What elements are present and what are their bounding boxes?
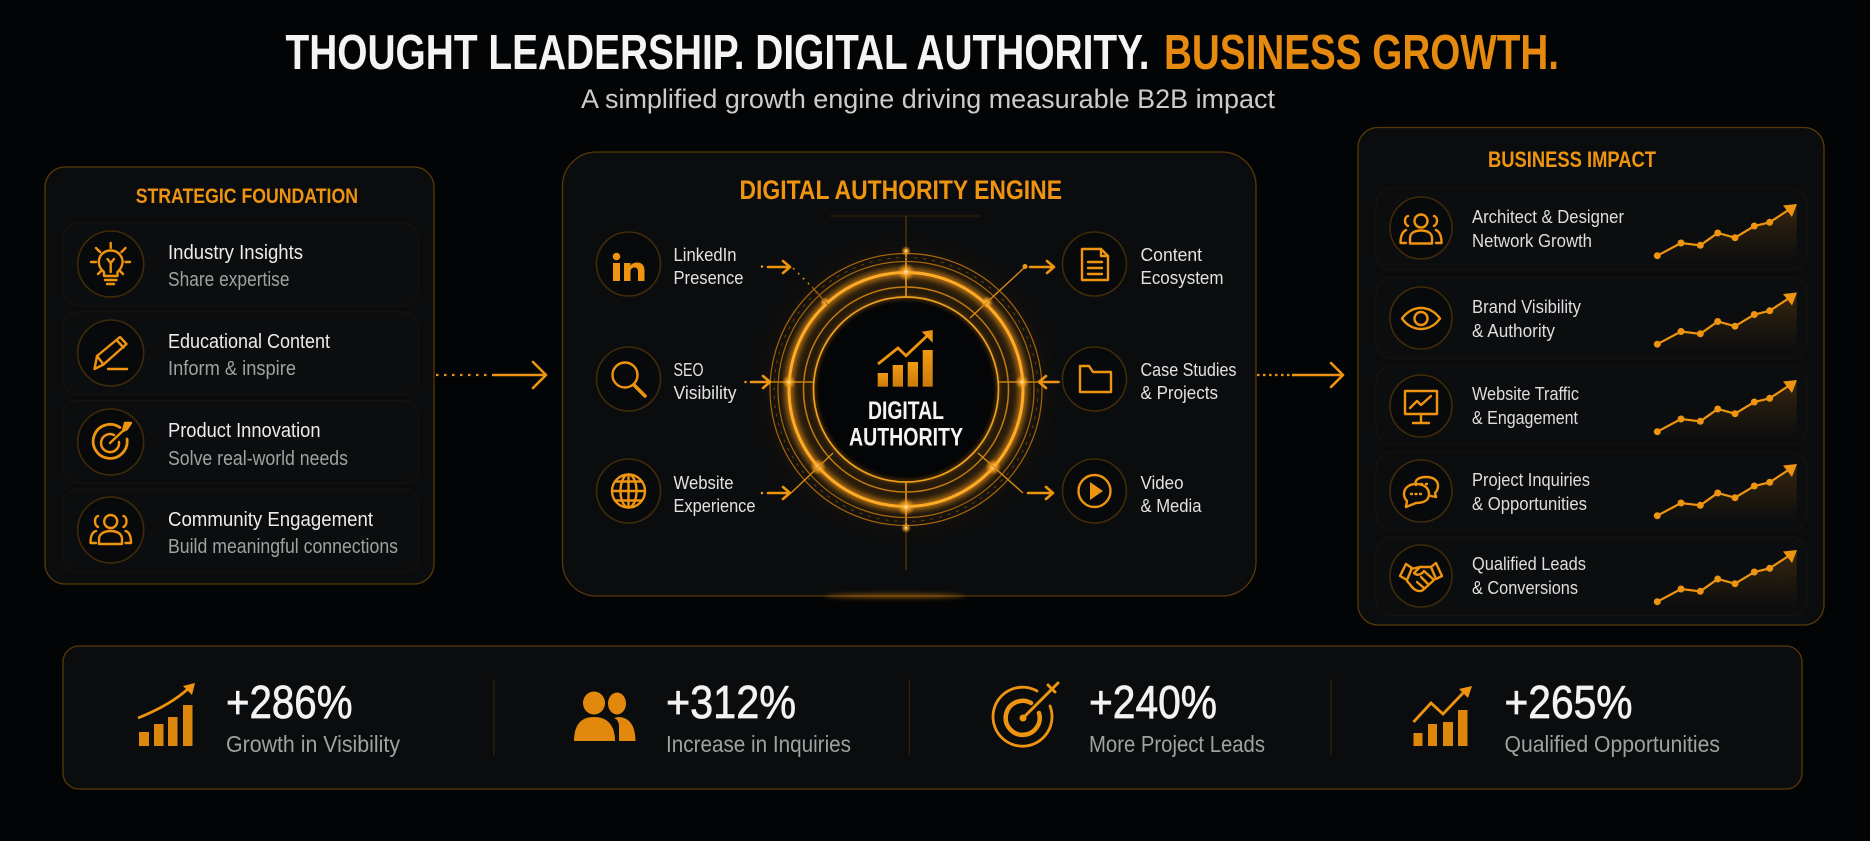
icon: people solid [574,692,636,741]
connectors: nodes and ring [744,261,1060,499]
node: video: & Media [1140,495,1202,516]
node: video: Video [1140,472,1184,493]
item: brand visibility: & Authority [1472,320,1556,341]
item: community engagement: Build meaningful connections [168,536,398,558]
item: qualified leads [1376,537,1807,616]
metric: more project leads: More Project Leads [1089,731,1265,757]
label: digital authority: AUTHORITY [849,424,963,452]
metric: growth in visibility: Growth in Visibility [226,731,400,757]
heading: strategic foundation: STRATEGIC FOUNDATION [136,184,358,208]
item: industry insights: Industry Insights [168,242,303,264]
node: website: Website [674,472,734,493]
metric: qualified opportunities [1414,676,1720,757]
arrow: engine to impact [1257,363,1343,387]
icon: bars with curve [138,683,195,746]
item: brand visibility [1376,277,1807,358]
panel: digital authority engine [562,152,1256,598]
node: content: Content [1140,244,1202,265]
metric: growth in visibility [138,676,400,757]
icon: bars with zigzag [1414,686,1472,746]
sparkle points [782,246,1029,533]
item: website traffic: & Engagement [1472,407,1578,428]
sparkline [1654,550,1797,608]
panel: strategic foundation [45,167,434,584]
item: educational content: Inform & inspire [168,358,296,380]
metric: increase in inquiries: Increase in Inquiries [666,731,851,757]
item: project inquiries [1376,452,1807,530]
central ring graphic [741,216,1071,570]
icon: target [93,423,131,458]
heading: business impact: BUSINESS IMPACT [1488,147,1656,172]
icon: globe [612,474,645,508]
item: community engagement: Community Engagement [168,509,373,531]
icon: people [1400,214,1442,244]
label: digital authority [849,397,963,452]
panel: key metrics [63,646,1802,789]
sparkline [1654,464,1797,522]
icon: people [90,515,131,544]
sparkline [1654,292,1797,350]
node: seo: SEO [674,359,704,380]
title: THOUGHT LEADERSHIP. DIGITAL AUTHORITY. [286,26,1150,80]
node: linkedin [596,232,744,296]
node: content: Ecosystem [1140,267,1224,288]
metric: more project leads: +240% [1089,676,1217,728]
item: industry insights: Share expertise [168,269,290,291]
node: case studies [1062,347,1236,411]
icon: target [993,683,1058,746]
item: educational content [62,312,418,395]
icon: handshake [1400,563,1442,591]
bottom edge glow [825,594,965,598]
node: linkedin: Presence [674,267,744,288]
icon: centre bar chart [878,330,933,387]
heading: digital authority engine: DIGITAL AUTHORITY ENGINE [740,175,1062,205]
node: website [596,459,756,523]
item: network growth: Architect & Designer [1472,206,1624,227]
item: product innovation [62,400,418,484]
node: seo [596,347,737,411]
item: website traffic: Website Traffic [1472,383,1579,404]
item: network growth [1376,188,1807,270]
item: project inquiries: Project Inquiries [1472,469,1590,490]
node: website: Experience [674,495,756,516]
icon: monitor [1405,391,1437,423]
metric: qualified opportunities: +265% [1504,676,1632,728]
item: qualified leads: & Conversions [1472,577,1578,598]
item: educational content: Educational Content [168,331,330,353]
panel: business impact [1358,128,1824,625]
item: project inquiries: & Opportunities [1472,493,1587,514]
item: network growth: Network Growth [1472,230,1592,251]
icon: document [1082,249,1108,280]
item: industry insights [62,223,418,306]
item: qualified leads: Qualified Leads [1472,553,1586,574]
metric: qualified opportunities: Qualified Opportunities [1504,731,1720,757]
metric: more project leads [993,676,1265,757]
item: community engagement [62,489,418,572]
node: video [1062,459,1202,523]
icon: pencil [94,337,127,369]
item: website traffic [1376,366,1807,444]
icon: eye [1402,308,1440,329]
item: product innovation: Solve real-world needs [168,448,348,470]
node: seo: Visibility [674,382,737,403]
item: product innovation: Product Innovation [168,420,320,442]
icon: linkedin [613,253,644,281]
node: case studies: Case Studies [1140,359,1236,380]
sparkline [1654,204,1797,262]
icon: speech bubbles [1404,477,1438,507]
subtitle: A simplified growth engine driving measurable B2B impact [581,84,1275,114]
metric: increase in inquiries [574,676,851,757]
title: BUSINESS GROWTH. [1164,26,1559,80]
icon: folder [1080,366,1111,392]
metric: increase in inquiries: +312% [666,676,796,728]
metric: growth in visibility: +286% [226,676,352,728]
node: content [1062,232,1224,296]
icon: magnifier [612,362,645,396]
label: digital authority: DIGITAL [868,397,944,425]
icon: play [1078,475,1110,507]
sparkline [1654,380,1797,438]
node: case studies: & Projects [1140,382,1218,403]
item: brand visibility: Brand Visibility [1472,296,1582,317]
icon: light bulb [91,243,130,284]
node: linkedin: LinkedIn [674,244,736,265]
arrow: foundation to engine [436,362,546,388]
